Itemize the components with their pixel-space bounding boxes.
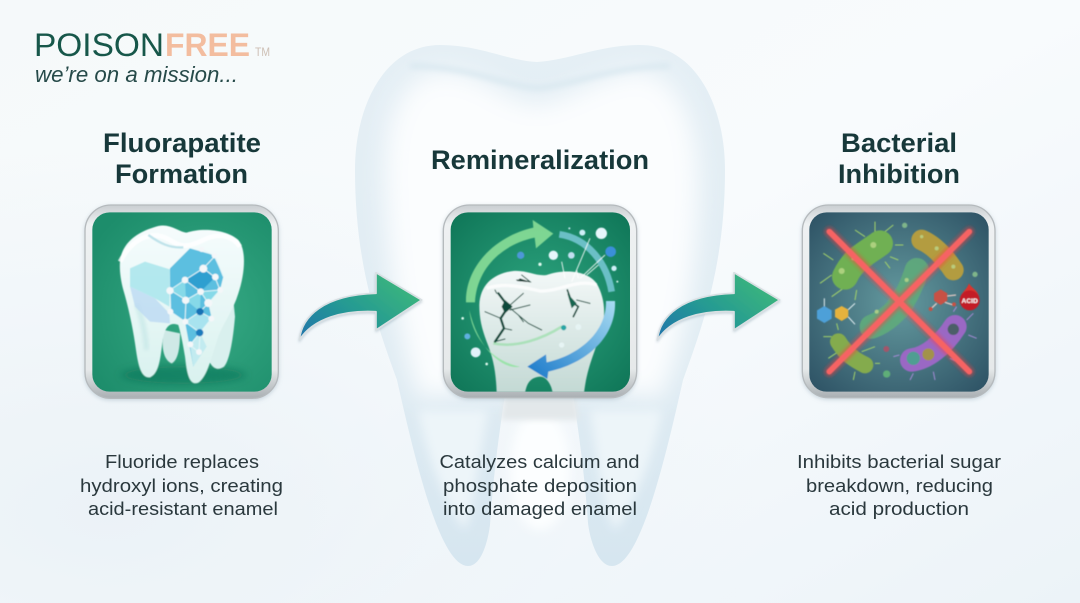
bubbles: [461, 227, 618, 365]
text block: bacterial inhibition description: Inhibits bacterial sugar: [797, 451, 1001, 472]
text block: bacterial inhibition description: acid production: [829, 498, 969, 519]
text block: fluorapatite description: [80, 451, 283, 519]
text block: remineralization description: into damaged enamel: [443, 498, 637, 519]
logo: FREE: [165, 27, 250, 63]
heading: Fluorapatite Formation: Formation: [115, 159, 248, 189]
logo: [34, 27, 270, 87]
text block: fluorapatite description: Fluoride replaces: [105, 451, 259, 472]
icon: fluorapatite tooth: [85, 205, 278, 398]
large background tooth: [355, 45, 725, 566]
heading: Fluorapatite Formation: [103, 128, 261, 189]
icon: bacterial inhibition: [802, 205, 995, 398]
arrow: blue circular: [527, 234, 615, 379]
cracks: [485, 275, 590, 342]
text block: remineralization description: phosphate deposition: [443, 475, 637, 496]
red X: [829, 232, 969, 372]
heading: Bacterial Inhibition: Bacterial: [841, 128, 957, 158]
arrow: green circular: [466, 220, 562, 367]
text block: bacterial inhibition description: [797, 451, 1001, 519]
heading: Bacterial Inhibition: Inhibition: [838, 159, 960, 189]
enamel lattice: [130, 247, 223, 367]
bacteria: [820, 222, 978, 380]
text block: remineralization description: [440, 451, 640, 519]
arrow: first to second: [299, 273, 422, 340]
text block: bacterial inhibition description: breakdown, reducing: [806, 475, 993, 496]
text block: remineralization description: Catalyzes calcium and: [440, 451, 640, 472]
logo: we’re on a mission...: [35, 62, 238, 87]
acid flame badge: [960, 283, 980, 310]
molecules: [817, 289, 956, 324]
arrow: second to third: [657, 273, 780, 340]
sparkles: [562, 238, 605, 282]
text block: fluorapatite description: acid-resistant enamel: [88, 498, 278, 519]
heading: Remineralization: Remineralization: [431, 145, 649, 175]
acid flame badge: ACID: [962, 298, 978, 305]
text block: fluorapatite description: hydroxyl ions, creating: [80, 475, 283, 496]
logo: TM: [255, 45, 270, 59]
heading: Fluorapatite Formation: Fluorapatite: [103, 128, 261, 158]
heading: Bacterial Inhibition: [838, 128, 960, 189]
icon: remineralization: [443, 205, 637, 398]
logo: POISON: [34, 27, 164, 63]
